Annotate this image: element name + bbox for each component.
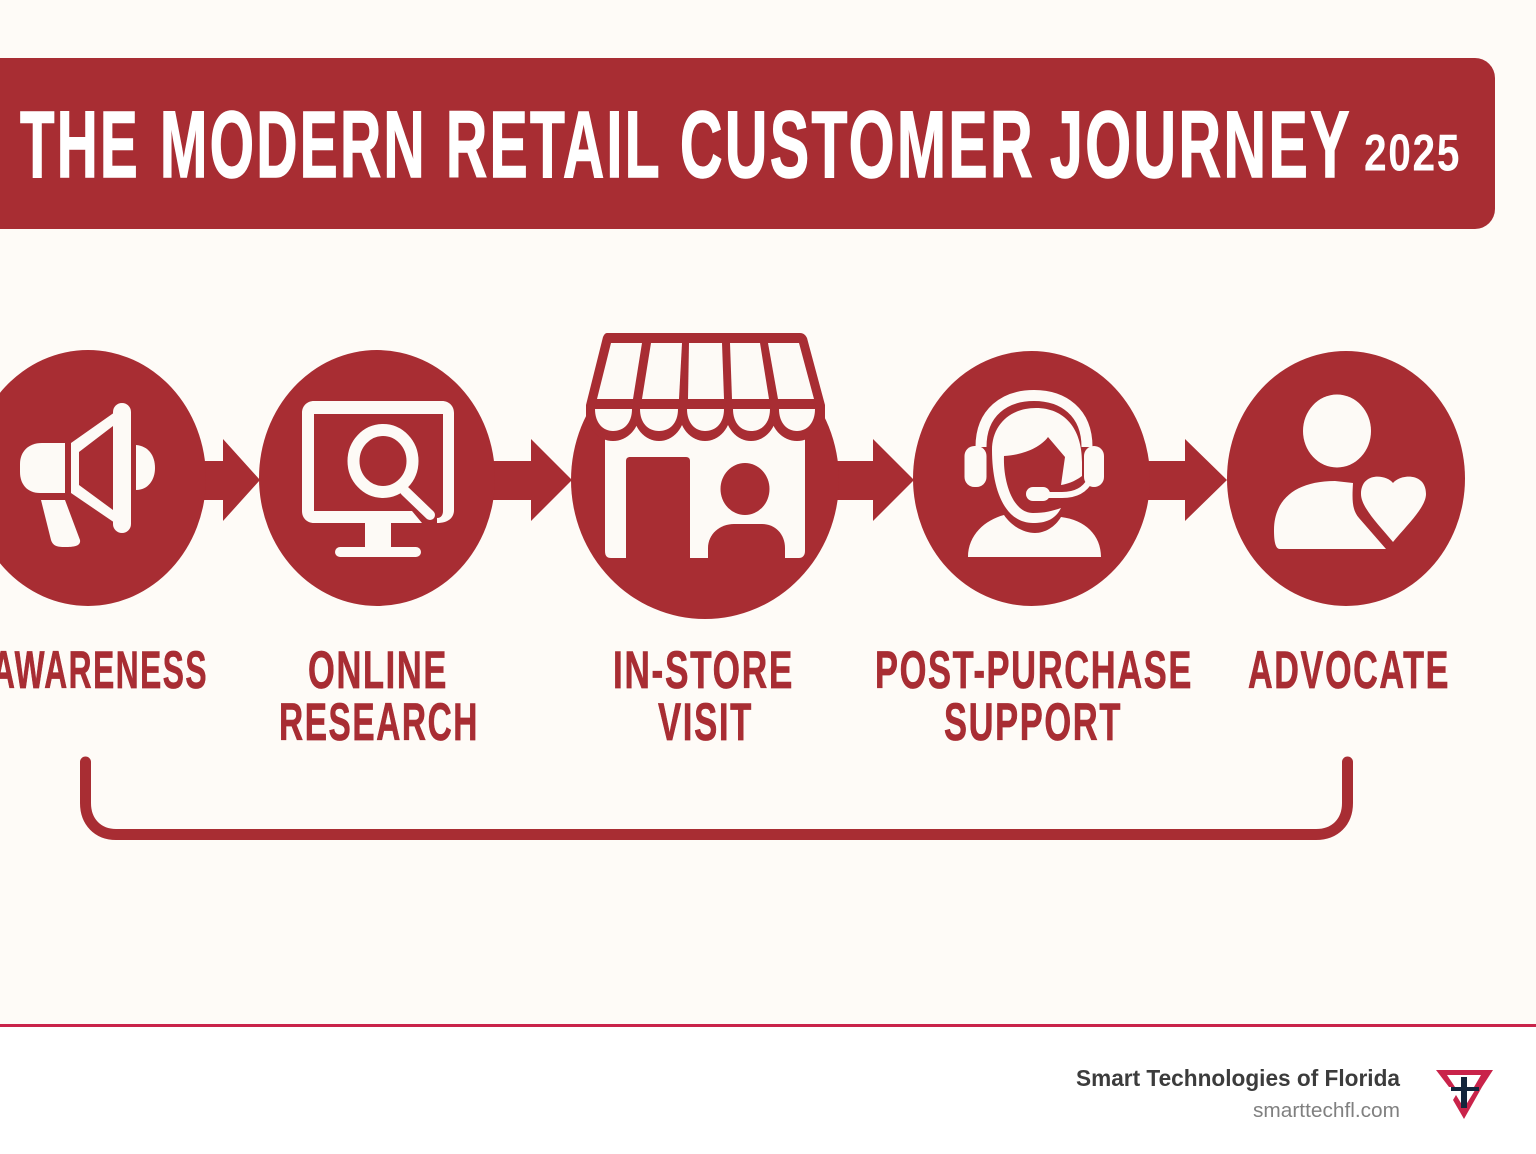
title banner: [0, 58, 1495, 229]
title: CUSTOMER: [680, 92, 1035, 198]
step: in-store visit: [571, 333, 839, 619]
label: online research: RESEARCH: [279, 693, 479, 752]
step: awareness: [0, 350, 206, 606]
title: [20, 92, 1352, 198]
title: MODERN: [160, 92, 427, 198]
arrow: awareness to online research: [190, 439, 260, 521]
step: post-purchase support: [913, 351, 1150, 606]
label: in-store visit: VISIT: [658, 693, 753, 752]
label: in-store visit: IN-STORE: [613, 641, 794, 700]
title: JOURNEY: [1050, 92, 1352, 198]
logo: [1436, 1070, 1493, 1119]
year: 2025: [1364, 124, 1461, 182]
icon: monitor with magnifier: [302, 401, 454, 557]
label: post-purchase support: [875, 641, 1193, 752]
label: post-purchase support: POST-PURCHASE: [875, 641, 1193, 700]
icon: person with heart: [1274, 394, 1426, 549]
label: online research: [279, 641, 479, 752]
company name: Smart Technologies of Florida: [1076, 1065, 1400, 1091]
icon: storefront: [586, 333, 825, 570]
loop bracket: [86, 762, 1348, 834]
title: RETAIL: [446, 92, 662, 198]
step: advocate: [1227, 351, 1465, 606]
label: online research: ONLINE: [308, 641, 448, 700]
icon: megaphone: [20, 403, 155, 547]
arrow: online research to in-store visit: [485, 439, 572, 521]
footer: [0, 1024, 1536, 1154]
arrow: post-purchase support to advocate: [1135, 439, 1227, 521]
website: smarttechfl.com: [1253, 1100, 1400, 1122]
step: online research: [259, 350, 495, 606]
arrow: in-store visit to post-purchase support: [825, 439, 914, 521]
label: in-store visit: [613, 641, 794, 752]
label: post-purchase support: SUPPORT: [944, 693, 1122, 752]
icon: support agent headset: [964, 396, 1104, 557]
label: awareness: AWARENESS: [0, 641, 208, 700]
title: THE: [20, 92, 140, 198]
